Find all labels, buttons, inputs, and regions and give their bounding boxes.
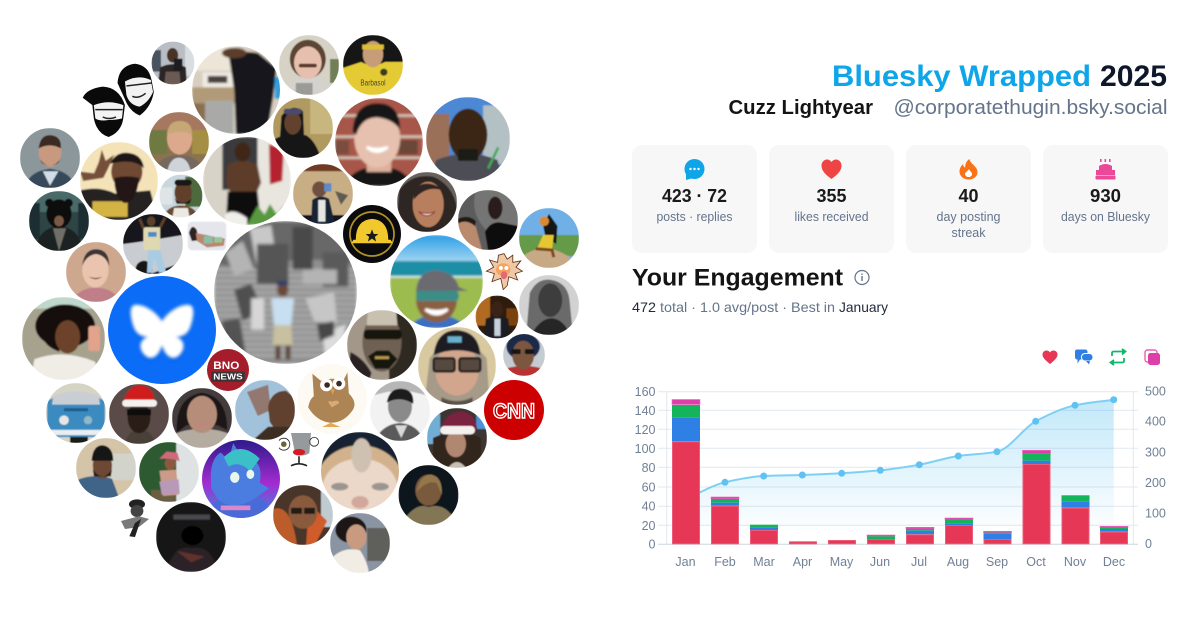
avatar: sunglasses portrait <box>347 310 417 380</box>
left axis labels: 0 <box>649 538 656 552</box>
display name: Cuzz Lightyear <box>728 97 873 119</box>
avatar: shirtless mirror selfie <box>203 137 291 225</box>
panel: days on Bluesky stat: 930 <box>1090 186 1121 206</box>
icon: reposts arrows <box>1110 349 1126 365</box>
panel: days on Bluesky stat: days on Bluesky <box>1061 210 1151 224</box>
left axis labels: 60 <box>642 480 656 494</box>
left axis labels: 100 <box>635 442 656 456</box>
avatar: blue furry character <box>202 440 280 518</box>
avatar: Bluesky butterfly logo <box>108 276 216 384</box>
avatar: man on white car <box>123 214 183 274</box>
left axis labels <box>635 385 656 552</box>
avatar: face with crystal <box>321 432 399 510</box>
avatar: hoodie selfie <box>426 97 510 181</box>
icon: info <box>855 270 869 284</box>
left axis labels: 140 <box>635 404 656 418</box>
avatar: bearded man peace sign <box>80 142 158 220</box>
right axis labels: 100 <box>1145 506 1166 520</box>
avatar: woman with orange hair and glasses <box>273 485 333 545</box>
avatar: hard hat logo <box>343 205 401 263</box>
panel: likes received stat <box>769 145 894 253</box>
left axis labels: 80 <box>642 461 656 475</box>
icon: speech bubble <box>684 159 704 180</box>
avatar: candlelit man <box>476 296 518 338</box>
avatar: blond man <box>149 112 209 172</box>
engagement summary: 472 <box>632 299 656 315</box>
avatar: woman in Santa hat <box>427 408 487 468</box>
panel: posts and replies stat: posts · replies <box>656 210 732 224</box>
avatar: cartoon tiger <box>486 253 524 290</box>
avatar: Santa hat man <box>109 384 169 444</box>
panel: days on Bluesky stat <box>1043 145 1168 253</box>
avatar: mirror selfie on tile <box>293 164 353 224</box>
avatar: bald man <box>66 242 126 302</box>
avatar: smiling man, brick wall <box>335 98 423 186</box>
month labels: Apr <box>793 555 812 569</box>
month labels: Mar <box>753 555 775 569</box>
panel: posting streak stat: day posting <box>936 210 1001 224</box>
avatar: young woman close-up <box>172 388 232 448</box>
chart: monthly engagement <box>635 384 1166 569</box>
panel: posting streak stat: streak <box>952 226 986 240</box>
avatar: dark figure with cap <box>156 502 226 572</box>
left axis labels: 120 <box>635 423 656 437</box>
right axis labels <box>1145 384 1166 551</box>
handle: @corporatethugin.bsky.social <box>894 97 1168 119</box>
icon: flame <box>960 159 978 180</box>
left axis labels: 20 <box>642 519 656 533</box>
avatar: back of head <box>458 190 518 250</box>
avatar: small monochrome figure <box>121 499 149 537</box>
month labels: Jul <box>911 555 927 569</box>
icon: heart <box>822 160 842 179</box>
panel: posting streak stat <box>906 145 1031 253</box>
engagement summary: total · 1.0 avg/post · Best in <box>660 299 835 315</box>
panel: posts and replies stat <box>632 145 757 253</box>
left axis labels: 160 <box>635 385 656 399</box>
avatar: yellow jersey: Barbasol <box>360 78 386 87</box>
month labels: Aug <box>947 555 969 569</box>
icon: likes heart <box>1042 350 1058 364</box>
avatar: small, white tank top <box>160 174 202 218</box>
month labels: Nov <box>1064 555 1087 569</box>
avatar: black bear in jacket <box>29 191 89 251</box>
avatar: kitchen back view <box>192 46 280 134</box>
avatar: small blurred reclining woman <box>188 222 226 250</box>
avatar: CNN logo <box>484 380 544 440</box>
chart legend icons <box>1042 349 1160 365</box>
avatar: BNO News logo <box>207 349 249 391</box>
avatar: cartoon woman yellow dress <box>519 208 579 268</box>
month labels: Feb <box>714 555 736 569</box>
avatar: owl illustration <box>297 364 367 434</box>
avatar: monochrome woman <box>519 275 579 335</box>
engagement summary: January <box>839 299 888 315</box>
title: Bluesky Wrapped <box>832 60 1091 93</box>
month labels <box>675 555 1125 569</box>
panel: likes received stat: 355 <box>816 186 846 206</box>
right axis labels: 0 <box>1145 537 1152 551</box>
avatar: beach man with cap <box>390 235 483 328</box>
left axis labels: 40 <box>642 500 656 514</box>
avatar: mirror selfie small <box>152 42 194 84</box>
icon: quotes squares <box>1145 350 1160 365</box>
avatar: profile with bare tree <box>235 380 295 440</box>
cumulative area and line <box>686 396 1117 544</box>
avatar: man in beanie <box>76 438 136 498</box>
right axis labels: 300 <box>1145 446 1166 460</box>
right axis labels: 200 <box>1145 476 1166 490</box>
avatar: man in suit monochrome <box>370 381 430 441</box>
avatar: BNO News logo: NEWS <box>213 372 243 382</box>
avatar: fantasy character <box>398 465 458 525</box>
avatar: large monochrome stairs photo <box>214 221 357 364</box>
avatar: man with dark glasses, blue hair <box>503 334 545 376</box>
month labels: Sep <box>986 555 1008 569</box>
panel: avatar bubble cluster <box>20 35 579 573</box>
avatar: grey cartoon mouse <box>279 433 319 466</box>
avatar: BNO News logo: BNO <box>213 360 240 372</box>
avatar: blue VW bus <box>46 383 106 443</box>
avatar: man in suit <box>20 128 80 188</box>
avatar: mustache man <box>279 35 339 95</box>
right axis labels: 400 <box>1145 414 1166 428</box>
panel: posting streak stat: 40 <box>958 186 978 206</box>
avatar: smiling woman <box>397 172 457 232</box>
stacked bars <box>672 400 1128 544</box>
avatar: yellow jersey <box>343 35 403 95</box>
avatar: woman with pink bucket hat <box>139 442 199 502</box>
avatar: woman with afro <box>22 297 105 380</box>
panel: posts and replies stat: 423 · 72 <box>662 186 727 206</box>
month labels: May <box>830 555 854 569</box>
month labels: Oct <box>1026 555 1046 569</box>
engagement summary <box>632 299 888 315</box>
icon: replies bubbles <box>1075 350 1093 364</box>
avatar: cartoon duo heads <box>82 64 154 137</box>
month labels: Jan <box>675 555 696 569</box>
avatar: woman in white scarf <box>330 513 390 573</box>
month labels: Dec <box>1103 555 1125 569</box>
avatar: hooded man with glasses <box>418 327 496 405</box>
avatar: CNN logo: CNN <box>493 400 535 423</box>
month labels: Jun <box>870 555 890 569</box>
right axis labels: 500 <box>1145 384 1166 398</box>
panel: likes received stat: likes received <box>794 210 869 224</box>
title: 2025 <box>1100 60 1167 93</box>
heading: your engagement: Your Engagement <box>632 264 843 292</box>
icon: cake <box>1096 159 1116 180</box>
avatar: man with dreads <box>273 98 333 158</box>
